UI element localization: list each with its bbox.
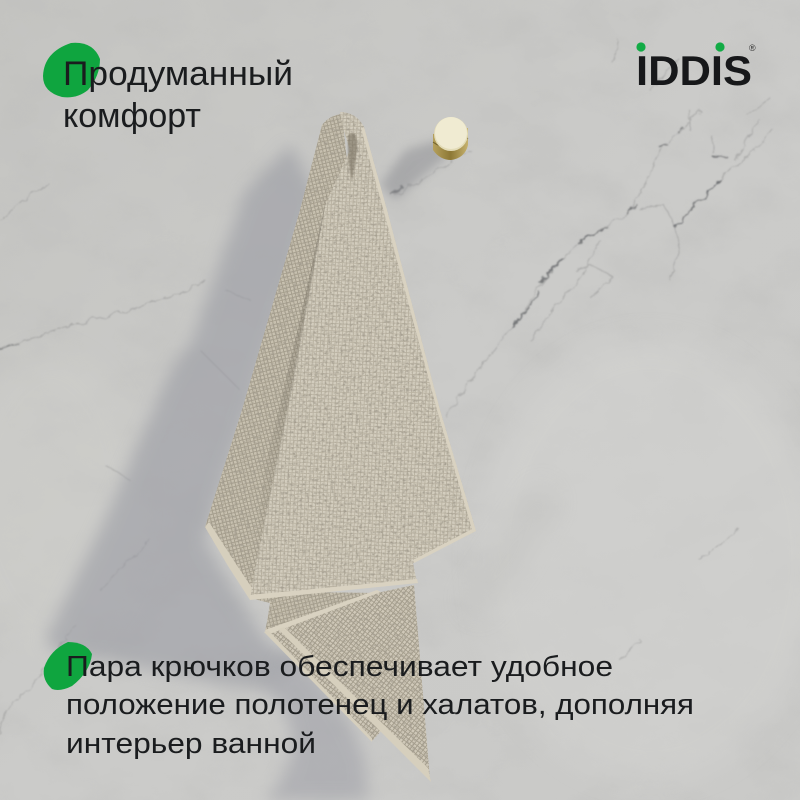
towel: lower hem [278, 627, 431, 782]
description text: Пара крючков обеспечивает удобное [66, 651, 613, 683]
towel [205, 112, 476, 780]
towel: left hem [205, 522, 252, 600]
towel: lower hanging panel [280, 585, 430, 780]
heading: комфорт [63, 97, 201, 135]
towel: sub-layer hem [264, 630, 372, 742]
logo: IDDIS: IDDIS [636, 47, 752, 94]
towel shadow on wall [45, 140, 448, 800]
towel: middle fold under main panel [250, 592, 378, 631]
description text [66, 651, 694, 760]
towel: lower sub-layer [265, 628, 384, 741]
logo: IDDIS: ® [749, 43, 756, 53]
description accent: green blob [44, 642, 92, 690]
brass hook [433, 117, 468, 160]
heading [63, 55, 293, 135]
description text: положение полотенец и халатов, дополняя [66, 689, 694, 721]
heading: Продуманный [63, 55, 293, 93]
towel: hook loop shadow [348, 133, 357, 182]
towel: bottom hem [250, 579, 418, 600]
towel details [205, 127, 476, 782]
towel: main front panel [250, 112, 476, 598]
heading accent: green blob [43, 43, 100, 97]
towel: back left panel [205, 114, 350, 598]
description text: интерьер ванной [66, 728, 316, 760]
towel: fold shadow [252, 190, 328, 590]
towel: right hem [361, 127, 476, 563]
towel: middle hem [265, 590, 381, 635]
